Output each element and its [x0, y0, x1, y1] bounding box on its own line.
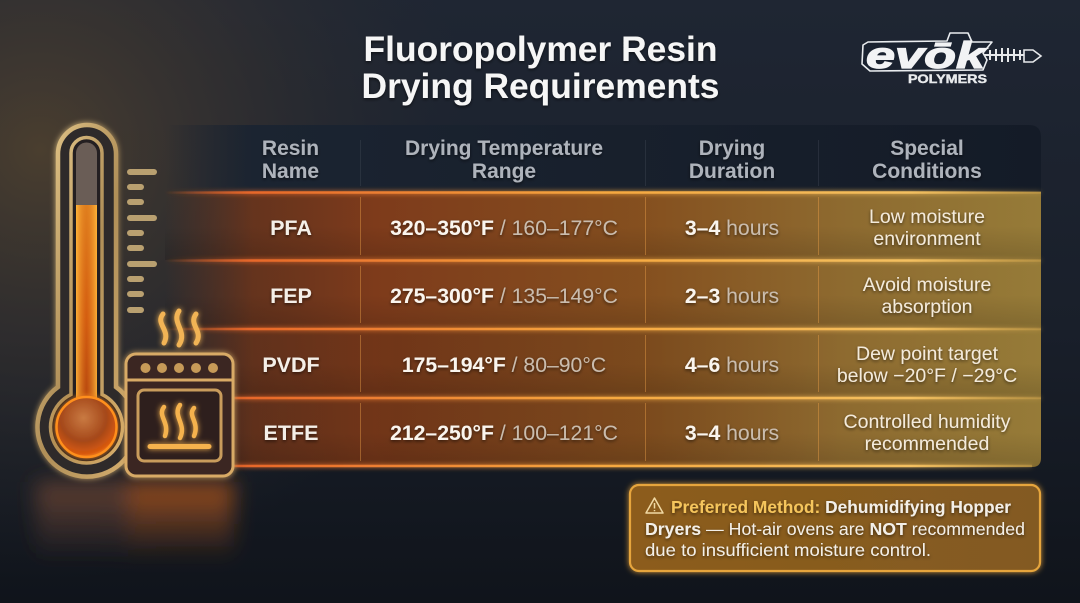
row: PVDF: 4–6 hours [685, 354, 779, 377]
oven dials [140, 363, 218, 373]
row: PVDF: below −20°F / −29°C [837, 365, 1017, 387]
title: Fluoropolymer Resin [364, 29, 717, 69]
table header: Conditions [872, 160, 982, 183]
thermometer bulb [56, 397, 116, 457]
row: PVDF [262, 343, 1017, 387]
callout text [645, 497, 1025, 560]
row: ETFE: 3–4 hours [685, 422, 779, 445]
row: FEP: FEP [270, 284, 312, 308]
row: PFA: 3–4 hours [685, 217, 779, 240]
logo: evok polymers: POLYMERS [908, 74, 987, 86]
row: FEP: 275–300°F / 135–149°C [390, 285, 618, 308]
row: PVDF: Dew point target [856, 343, 999, 365]
table header: Special [890, 137, 964, 160]
oven door [138, 390, 221, 461]
row: FEP: Avoid moisture [863, 274, 991, 296]
table header: Drying Temperature [405, 137, 603, 160]
oven icon [126, 311, 233, 476]
oven heat waves [150, 405, 209, 446]
thermometer outer shell [38, 125, 136, 477]
oven steam [161, 311, 198, 345]
thermometer glass [76, 142, 97, 205]
logo: evok polymers: evōk [866, 35, 988, 76]
row: PFA: Low moisture [869, 206, 985, 228]
table header: Drying [699, 137, 765, 160]
table header [165, 125, 1041, 192]
logo drill bit [984, 48, 1041, 62]
logo: evok polymers [862, 33, 1041, 86]
table [165, 125, 1041, 467]
row: PVDF: 175–194°F / 80–90°C [402, 354, 606, 377]
row: PFA: PFA [270, 216, 312, 240]
row: ETFE: ETFE [264, 421, 318, 445]
row: FEP: 2–3 hours [685, 285, 779, 308]
table header: Range [472, 160, 536, 183]
thermometer inner tube [50, 138, 122, 463]
table header: Name [262, 160, 319, 183]
row: PFA [270, 206, 985, 250]
callout text: Dryers — Hot-air ovens are NOT recommended [645, 519, 1025, 539]
table header: Resin [262, 137, 319, 160]
row: FEP: absorption [881, 296, 973, 318]
row: ETFE: recommended [865, 433, 989, 455]
row: PVDF: PVDF [262, 353, 320, 377]
row: FEP [270, 274, 991, 318]
table header: Duration [689, 160, 775, 183]
floor reflection [36, 482, 234, 560]
row: ETFE [264, 411, 1011, 455]
title: Drying Requirements [362, 66, 719, 106]
callout: preferred method [630, 485, 1040, 571]
row: ETFE: 212–250°F / 100–121°C [390, 422, 618, 445]
thermometer [38, 125, 136, 477]
callout text: Preferred Method: Dehumidifying Hopper [671, 497, 1011, 517]
oven body [126, 354, 233, 476]
row: PFA: environment [873, 228, 981, 250]
callout text: due to insufficient moisture control. [645, 540, 931, 560]
thermometer mercury column [76, 205, 97, 410]
temperature scale ticks [127, 169, 157, 313]
table body fill [165, 192, 1041, 467]
row: PFA: 320–350°F / 160–177°C [390, 217, 618, 240]
icon: warning triangle [646, 498, 663, 513]
title [362, 29, 719, 106]
row: ETFE: Controlled humidity [844, 411, 1011, 433]
